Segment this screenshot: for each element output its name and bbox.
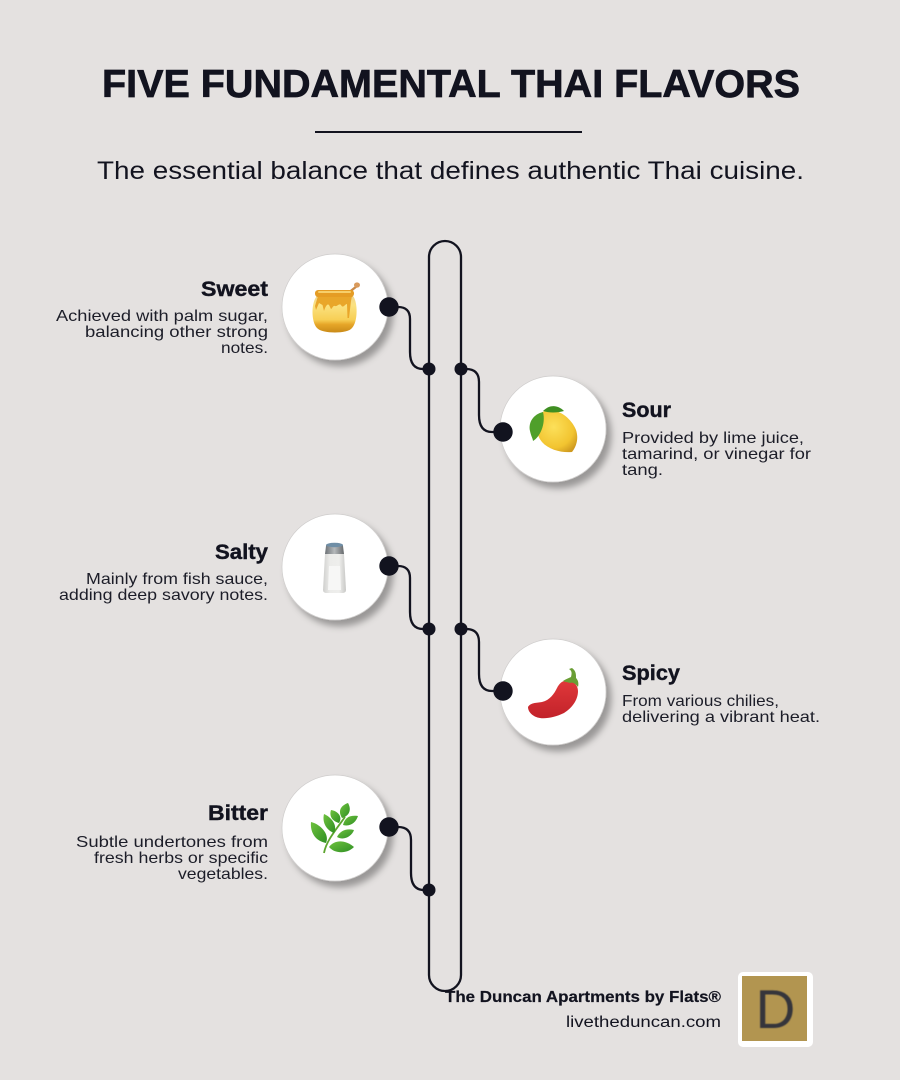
footer logo: D — [756, 978, 795, 1040]
junction dot: sweet — [422, 362, 436, 376]
description: bitter: fresh herbs or specific — [94, 850, 268, 867]
heading: sour: Sour — [622, 399, 671, 422]
description: spicy: delivering a vibrant heat. — [622, 709, 820, 726]
icon: chili pepper — [528, 668, 578, 718]
heading: sweet: Sweet — [201, 278, 268, 301]
icon: salt shaker — [323, 543, 346, 593]
icon: lemon — [530, 406, 577, 452]
description: sweet: balancing other strong — [85, 324, 268, 341]
connectors — [389, 307, 503, 890]
panel: salty — [59, 514, 436, 636]
panel: sweet — [56, 254, 436, 376]
description: bitter — [76, 834, 268, 883]
icon: honey pot — [312, 282, 360, 332]
connector dot: salty — [379, 556, 399, 576]
heading: salty: Salty — [215, 541, 268, 564]
connector dot: sour — [493, 422, 513, 442]
connector dot: bitter — [379, 817, 399, 837]
icon circle: sweet — [282, 254, 388, 360]
junction dot: bitter — [422, 884, 436, 896]
panel: sour — [454, 362, 812, 482]
connector dot: spicy — [493, 681, 513, 701]
description: sweet — [56, 308, 268, 357]
icon: herb sprig — [311, 803, 358, 853]
description: sweet: Achieved with palm sugar, — [56, 308, 268, 325]
icon circle: spicy — [500, 639, 606, 745]
description: sour — [622, 430, 812, 479]
description: sour: tamarind, or vinegar for — [622, 446, 812, 463]
description: spicy — [622, 693, 820, 726]
central capsule timeline — [429, 241, 461, 991]
icon circle: bitter — [282, 775, 388, 881]
footer brand name: The Duncan Apartments by Flats® — [445, 989, 722, 1006]
icon circle: sour — [500, 376, 606, 482]
heading: bitter: Bitter — [208, 802, 268, 825]
description: bitter: Subtle undertones from — [76, 834, 268, 851]
description: bitter: vegetables. — [178, 866, 268, 883]
junction dot: salty — [422, 622, 436, 636]
description: spicy: From various chilies, — [622, 693, 779, 710]
description: salty: Mainly from fish sauce, — [86, 571, 268, 588]
junction dot: spicy — [454, 622, 468, 636]
description: salty — [59, 571, 268, 604]
title: FIVE FUNDAMENTAL THAI FLAVORS — [102, 63, 800, 106]
description: salty: adding deep savory notes. — [59, 587, 268, 604]
junction dot: sour — [454, 362, 468, 376]
heading: spicy: Spicy — [622, 662, 680, 685]
panel: spicy — [454, 622, 820, 745]
icon circle: salty — [282, 514, 388, 620]
footer website: livetheduncan.com — [566, 1014, 721, 1031]
footer — [445, 972, 813, 1047]
description: sweet: notes. — [221, 340, 268, 357]
connector dot: sweet — [379, 297, 399, 317]
panel: bitter — [76, 775, 436, 896]
description: sour: Provided by lime juice, — [622, 430, 804, 447]
description: sour: tang. — [622, 462, 663, 479]
subtitle: The essential balance that defines authentic Thai cuisine. — [97, 157, 804, 185]
footer logo — [738, 972, 813, 1047]
